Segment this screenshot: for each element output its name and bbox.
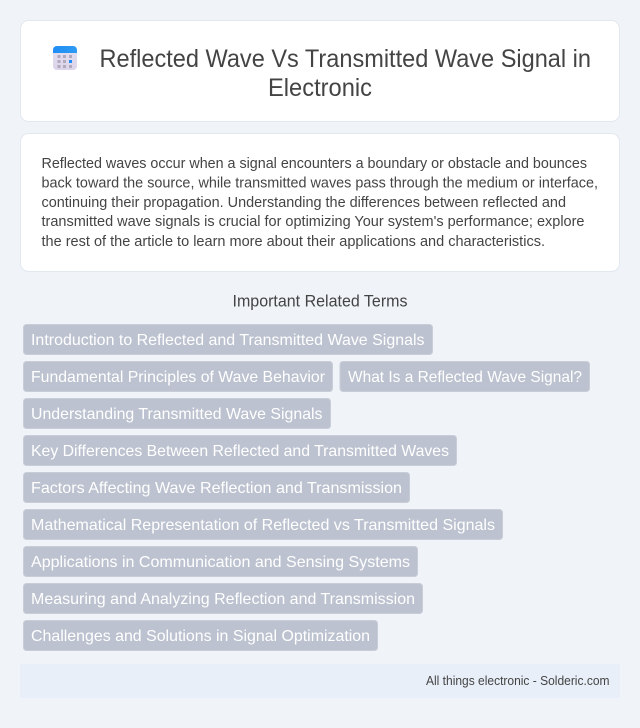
tag: introduction: Introduction to Reflected and Transmitted Wave Signals [31, 332, 424, 349]
heading: important related terms: Important Related Terms [232, 292, 408, 310]
tag: challenges: Challenges and Solutions in Signal Optimization [31, 628, 370, 645]
text block: description: back toward the source, while transmitted waves pass through the medium or interface, [42, 175, 598, 191]
tag: transmitted wave signals: Understanding Transmitted Wave Signals [31, 406, 322, 423]
tag: transmitted wave signals [24, 398, 330, 428]
tag: measuring: Measuring and Analyzing Reflection and Transmission [31, 591, 415, 608]
tag: fundamental principles [24, 362, 332, 392]
tag: applications: Applications in Communication and Sensing Systems [31, 554, 410, 571]
tag: factors: Factors Affecting Wave Reflection and Transmission [31, 480, 402, 497]
panel: title card [20, 20, 620, 122]
tag: mathematical representation [24, 510, 502, 540]
tag: challenges [24, 620, 378, 650]
tag: reflected wave signal: What Is a Reflected Wave Signal? [348, 369, 582, 386]
tag: key differences: Key Differences Between Reflected and Transmitted Waves [31, 443, 449, 460]
tag: fundamental principles: Fundamental Principles of Wave Behavior [31, 369, 326, 386]
icon: calendar [53, 46, 77, 70]
text block: description: Reflected waves occur when a signal encounters a boundary or obstacle and bounces [42, 156, 587, 172]
tag: reflected wave signal [340, 362, 590, 392]
tag: key differences [24, 436, 456, 466]
footer: All things electronic - Solderic.com [426, 674, 610, 688]
title: Electronic [268, 74, 372, 102]
footer [20, 664, 620, 698]
text block: description: continuing their propagation. Understanding the differences between reflected and [42, 195, 566, 211]
tag: applications [24, 546, 418, 576]
text block: description: the rest of the article to learn more about their applications and characteristics. [42, 234, 545, 250]
tag: factors [24, 472, 410, 502]
tag: introduction [24, 324, 432, 354]
tag: mathematical representation: Mathematical Representation of Reflected vs Transmitted Signals [31, 517, 495, 534]
text block: description: transmitted wave signals is crucial for optimizing Your system's performance; explore [42, 214, 584, 230]
tag: measuring [24, 584, 422, 614]
title: Reflected Wave Vs Transmitted Wave Signal in [100, 45, 591, 73]
panel: description [20, 134, 620, 272]
